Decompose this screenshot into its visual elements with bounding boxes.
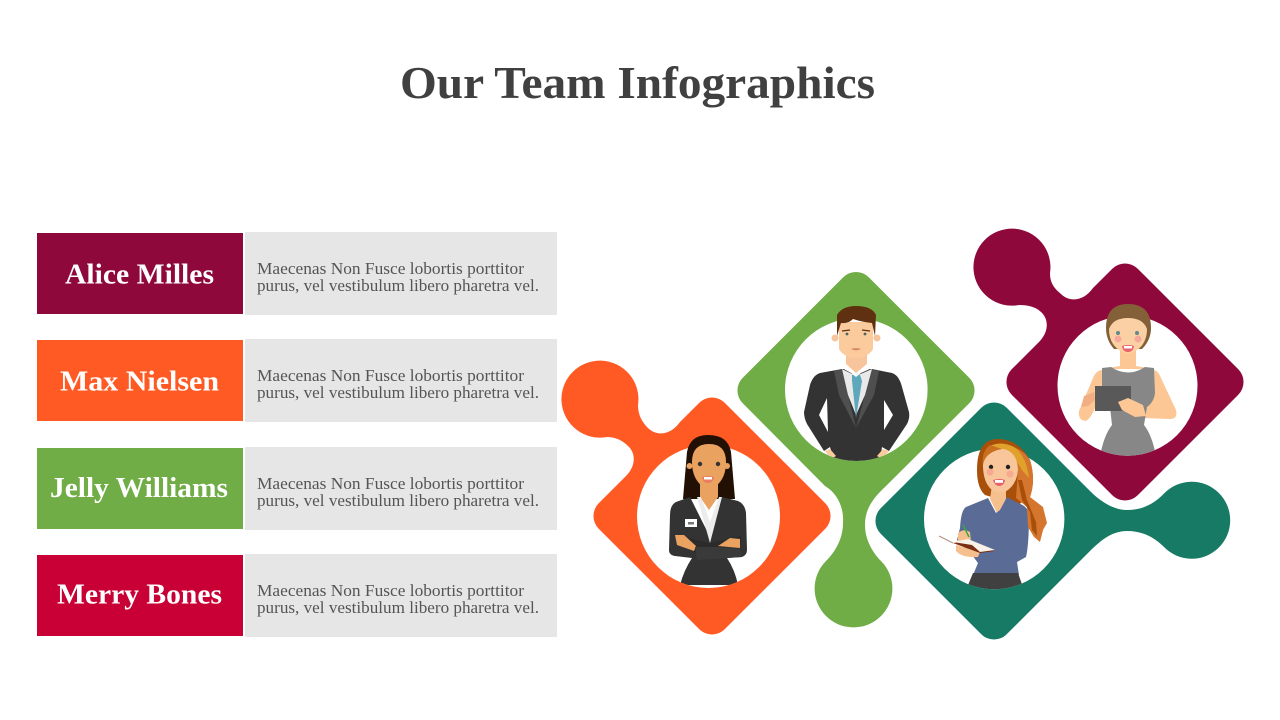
row: Merry Bones: Maecenas Non Fusce lobortis porttitor [257,581,525,600]
row: Alice Milles [37,232,557,315]
team list [37,232,557,637]
title: Our Team Infographics [400,57,875,108]
panel: teal puzzle piece [875,402,1230,640]
panel: maroon puzzle piece [973,229,1244,501]
row: Max Nielsen: Maecenas Non Fusce lobortis porttitor [257,366,525,385]
row: Merry Bones: purus, vel vestibulum libero pharetra vel. [257,598,539,617]
row: Jelly Williams [37,447,557,530]
row: Max Nielsen [37,339,557,422]
puzzle diagram [561,229,1244,640]
row: Merry Bones [37,554,557,637]
row: Merry Bones: Merry Bones [57,578,222,610]
panel: orange puzzle piece [561,361,831,635]
row: Alice Milles: Alice Milles [65,258,214,290]
icon: woman with crossed arms [669,435,747,585]
row: Jelly Williams: Maecenas Non Fusce lobortis porttitor [257,474,525,493]
icon: woman with notebook [939,439,1047,590]
icon: woman with tablet [1079,304,1176,456]
row: Max Nielsen: Max Nielsen [60,366,219,398]
row: Jelly Williams: purus, vel vestibulum libero pharetra vel. [257,491,539,510]
icon: man in suit [804,306,909,461]
row: Alice Milles: Maecenas Non Fusce lobortis porttitor [257,259,525,278]
row: Alice Milles: purus, vel vestibulum libero pharetra vel. [257,276,539,295]
panel: green puzzle piece [737,272,975,627]
row: Jelly Williams: Jelly Williams [50,472,228,504]
row: Max Nielsen: purus, vel vestibulum libero pharetra vel. [257,383,539,402]
